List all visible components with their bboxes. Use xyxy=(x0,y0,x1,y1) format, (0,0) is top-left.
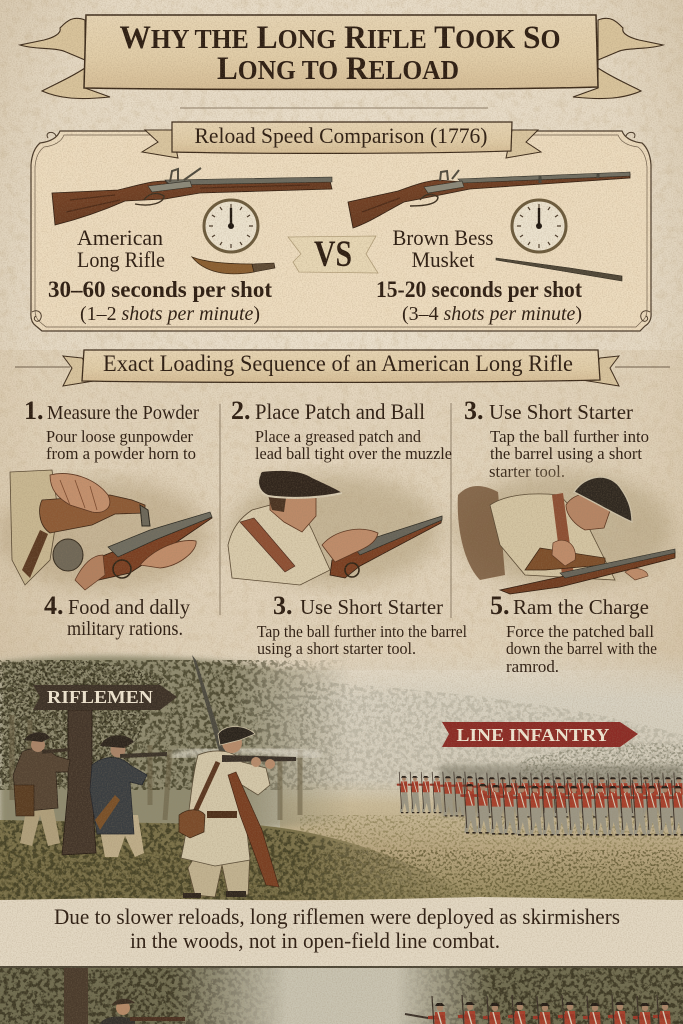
title text: WHY THE LONG RIFLE TOOK SO xyxy=(120,20,560,56)
step 3 illustration xyxy=(457,472,675,594)
VS badge xyxy=(288,234,378,275)
line infantry label: LINE INFANTRY xyxy=(456,725,610,745)
rifleman 2 xyxy=(90,735,167,857)
step 3 repeated: use short starter xyxy=(257,591,467,658)
step 4: food and daily rations xyxy=(44,591,190,640)
step 3 repeated: use short starter: 3. xyxy=(273,591,292,620)
step 3: use short starter: Use Short Starter xyxy=(489,400,633,424)
Brown Bess label: Brown Bess xyxy=(392,225,494,250)
shots per minute: Brown Bess: (3–4 shots per minute) xyxy=(402,303,582,325)
icon: ramrod xyxy=(496,258,622,281)
step 5: ram the charge: down the barrel with the xyxy=(506,639,657,658)
caption strip: Due to slower reloads, long riflemen were deployed as skirmishers xyxy=(54,904,620,929)
step 1: measure the powder: 1. xyxy=(24,396,44,425)
loading sequence banner xyxy=(63,350,619,386)
step 5: ram the charge xyxy=(490,591,657,676)
step 5: ram the charge: Ram the Charge xyxy=(513,595,649,619)
rifleman in second scene xyxy=(100,999,185,1024)
caption strip: in the woods, not in open-field line combat. xyxy=(130,928,500,953)
step 2 illustration xyxy=(228,471,442,585)
clock: American rifle xyxy=(204,200,258,252)
step 3: use short starter: starter tool. xyxy=(489,462,565,481)
left forest foliage xyxy=(0,656,360,840)
second battle scene (cropped) xyxy=(0,966,683,1024)
corner scrolls xyxy=(32,132,650,321)
left banner tail xyxy=(20,18,110,99)
step 4: food and daily rations: 4. xyxy=(44,591,64,620)
step 3 repeated: use short starter: using a short starter tool. xyxy=(257,639,416,658)
step 2: place patch and ball: 2. xyxy=(231,396,250,425)
reload time: American rifle: 30–60 seconds per shot xyxy=(48,277,272,302)
comparison banner xyxy=(142,122,541,158)
dark canopy and background tree trunks xyxy=(0,660,300,820)
step 3: use short starter xyxy=(464,396,649,481)
step 1: measure the powder: from a powder horn to xyxy=(46,444,196,463)
step 2: place patch and ball: Place Patch and Ball xyxy=(255,399,425,424)
step 2: place patch and ball xyxy=(231,396,452,463)
step 1: measure the powder xyxy=(24,396,199,463)
step 1 illustration xyxy=(0,470,212,590)
step 1: measure the powder: Measure the Powder xyxy=(47,402,199,424)
loading sequence banner: Exact Loading Sequence of an American Long Rifle xyxy=(103,351,573,376)
battle scene xyxy=(0,650,683,900)
reload time: Brown Bess: 15-20 seconds per shot xyxy=(376,277,582,302)
VS badge: VS xyxy=(314,234,352,275)
step 3: use short starter: Tap the ball further into xyxy=(490,427,649,446)
rifleman 1 xyxy=(13,732,70,846)
step 5: ram the charge: ramrod. xyxy=(506,657,559,676)
step 3: use short starter: the barrel using a short xyxy=(490,444,642,463)
title banner: LONG TO RELOAD xyxy=(217,51,459,87)
comparison panel: Musket xyxy=(412,247,474,272)
step 5: ram the charge: 5. xyxy=(490,591,510,620)
comparison panel xyxy=(31,122,651,331)
comparison panel: Long Rifle xyxy=(77,247,165,272)
open field xyxy=(280,780,683,900)
step 4: food and daily rations: military rations. xyxy=(67,618,183,640)
step 5: ram the charge: Force the patched ball xyxy=(506,622,654,641)
riflemen label: RIFLEMEN xyxy=(47,687,153,707)
right banner tail xyxy=(573,18,663,99)
shots per minute: American rifle: (1–2 shots per minute) xyxy=(80,303,260,325)
step 3 repeated: use short starter: Use Short Starter xyxy=(300,595,443,619)
American long rifle illustration xyxy=(52,168,332,225)
rifleman 3 with slung long rifle xyxy=(172,655,320,898)
tree trunk xyxy=(62,710,96,855)
redcoats in second scene xyxy=(405,995,674,1024)
step 1: measure the powder: Pour loose gunpowder xyxy=(46,427,193,446)
step 2: place patch and ball: lead ball tight over the muzzle xyxy=(255,444,452,463)
riflemen label xyxy=(33,685,177,710)
Brown Bess musket illustration xyxy=(348,170,630,228)
comparison banner: Reload Speed Comparison (1776) xyxy=(194,123,488,148)
step 3 repeated: use short starter: Tap the ball further into the barrel xyxy=(257,622,467,641)
American long rifle label: American xyxy=(77,225,163,250)
misty sky and distant trees xyxy=(0,650,683,900)
forest floor undergrowth xyxy=(0,820,480,900)
clock: Brown Bess xyxy=(512,200,566,252)
field grass texture xyxy=(300,815,683,900)
ground speckle xyxy=(0,850,683,900)
line infantry label xyxy=(442,722,638,747)
caption strip xyxy=(0,897,683,966)
tree canopy fading into haze xyxy=(0,968,683,1024)
line infantry regiment xyxy=(397,765,683,835)
step 4: food and daily rations: Food and dally xyxy=(68,595,190,619)
icon: knife xyxy=(192,257,275,274)
step 2: place patch and ball: Place a greased patch and xyxy=(255,427,422,446)
title banner xyxy=(20,15,663,99)
step 3: use short starter: 3. xyxy=(464,396,484,425)
